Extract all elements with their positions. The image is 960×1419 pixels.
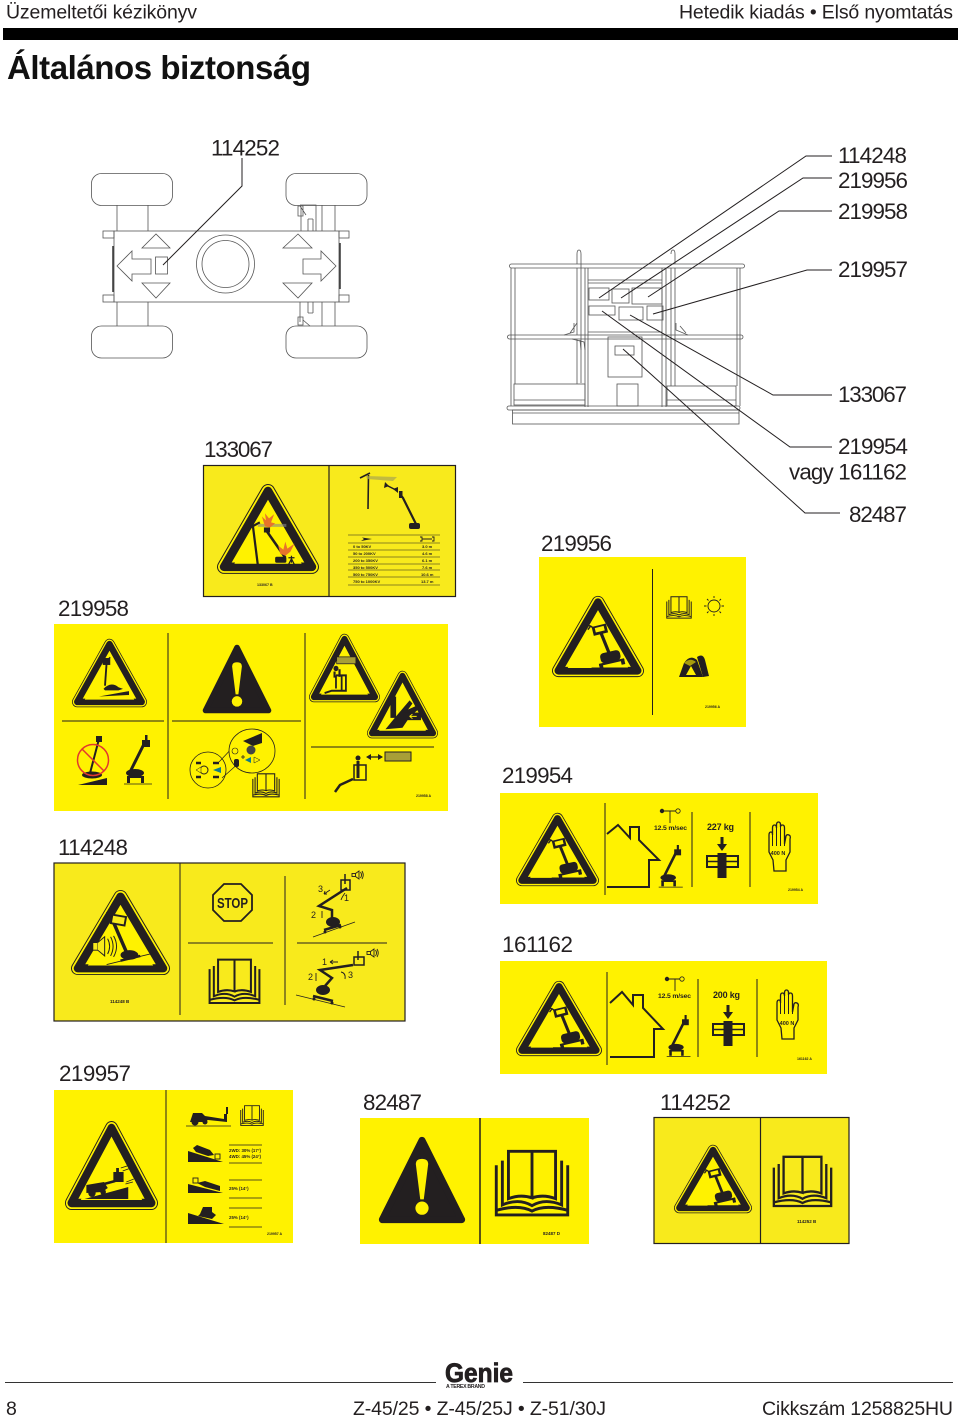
- table: voltage clearances: 0 to 50KV: [353, 544, 372, 549]
- icon: wind speed: [654, 809, 687, 832]
- part code: 161162 A: [797, 1057, 812, 1061]
- header right text: Hetedik kiadás • Első nyomtatás: [679, 2, 953, 24]
- icon: retrieval sequence lower: [296, 949, 378, 1007]
- icon: operator clearance: [335, 752, 411, 792]
- heading: 219958: 219958: [58, 596, 129, 621]
- heading: 219954: 219954: [502, 763, 573, 788]
- icon: retrieval sequence lower: 2: [308, 972, 313, 982]
- callouts: platform labels and leader lines: 82487: [849, 502, 907, 527]
- footer rules: [5, 1382, 953, 1384]
- icon: manual: [667, 597, 691, 618]
- part code: 219956 A: [705, 705, 721, 709]
- callouts: platform labels and leader lines: 219954: [838, 434, 908, 459]
- part code: 114248 B: [110, 999, 130, 1004]
- table: voltage clearances: 200 to 350KV: [353, 558, 378, 563]
- slope limits text: [229, 1145, 262, 1227]
- table: voltage clearances: 7.6 m: [422, 565, 433, 570]
- callouts: platform labels and leader lines: vagy 161162: [789, 460, 907, 484]
- part code: 114252 B: [797, 1219, 817, 1224]
- icon: prohibited tilted machine: [78, 736, 108, 785]
- panel: decal 114252: [654, 1117, 849, 1244]
- icon: load limit: [707, 822, 738, 878]
- icon: warning tent: [679, 656, 709, 677]
- icon: retrieval sequence upper: [311, 871, 363, 937]
- panel: decal 219956: [539, 557, 746, 727]
- heading: 82487: 82487: [363, 1090, 422, 1115]
- diagram: platform front view: [507, 250, 744, 424]
- callout: 114252 on chassis: 114252: [211, 136, 280, 160]
- icon: load limit: [713, 990, 744, 1046]
- table: voltage clearances: 3.0 m: [422, 544, 433, 549]
- icon: tip-over triangle: [522, 819, 593, 880]
- logo: Genie: Genie: [445, 1358, 513, 1388]
- icon: manual: [210, 960, 259, 1003]
- icon: warning: [382, 1140, 462, 1220]
- table: voltage clearances: [348, 535, 440, 585]
- icon: load limit: 227 kg: [707, 822, 734, 832]
- icon: crush hazard triangle: [314, 639, 375, 697]
- part code: 82487 D: [543, 1231, 561, 1236]
- icon: manual force: 400 N: [780, 1021, 794, 1027]
- icon: manual force: [769, 822, 790, 871]
- panel: decal 219954: [500, 793, 818, 904]
- icon: sun: [704, 596, 724, 616]
- heading: 219957: 219957: [59, 1061, 131, 1086]
- icon: tip-over triangle: [522, 987, 596, 1050]
- panel: decal 219958: [54, 624, 448, 811]
- icon: wind speed: 12.5 m/sec: [654, 825, 687, 832]
- slope limits text: 25% (14°): [229, 1215, 249, 1220]
- part code: 133067 B: [257, 583, 273, 587]
- icon: retrieval sequence upper: 1: [344, 893, 349, 903]
- icon: hand crush triangle: [372, 676, 433, 733]
- panel: decal 82487: [360, 1118, 589, 1244]
- icon: stowed machine: [186, 1107, 231, 1126]
- title: Általános biztonság: [7, 49, 311, 86]
- table: voltage clearances: 10.6 m: [421, 572, 434, 577]
- part code: 219958 A: [416, 794, 432, 798]
- slope limits text: 25% (14°): [229, 1186, 249, 1191]
- icon: tilt alarm triangle: [78, 897, 163, 968]
- table: voltage clearances: 13.7 m: [421, 579, 434, 584]
- icon: wind speed: [658, 977, 691, 1000]
- table: voltage clearances: 750 to 1000KV: [353, 579, 380, 584]
- heading: 114252: 114252: [660, 1090, 731, 1115]
- icon: machine: [659, 845, 683, 887]
- icon: electrocution warning triangle: [224, 491, 312, 567]
- icon: house: [610, 992, 663, 1057]
- icon: slope warning triangle: [72, 1128, 151, 1203]
- icon: retrieval sequence lower: 1: [322, 957, 327, 967]
- table: voltage clearances: 4.6 m: [422, 551, 433, 556]
- icon: house: [607, 825, 659, 887]
- callout: 114252 on chassis: [163, 136, 280, 265]
- callouts: platform labels and leader lines: 219957: [838, 257, 908, 282]
- icon: load limit: 200 kg: [713, 990, 740, 1000]
- icon: stop sign: STOP: [217, 895, 248, 912]
- heading: 161162: 161162: [502, 932, 573, 957]
- icon: tip-over triangle: [679, 1150, 747, 1208]
- icon: machine: [667, 1015, 690, 1057]
- heading: 114248: 114248: [58, 835, 128, 860]
- slope limits text: 4WD: 45% (24°): [229, 1154, 262, 1159]
- icon: manual: [774, 1157, 831, 1206]
- callouts: platform labels and leader lines: 133067: [838, 382, 907, 407]
- callouts: platform labels and leader lines: [599, 143, 908, 527]
- part code: 219957 A: [267, 1232, 283, 1236]
- icon: retrieval sequence upper: 3: [318, 884, 323, 894]
- table: voltage clearances: 350 to 500KV: [353, 565, 378, 570]
- slope limits text: 2WD: 30% (17°): [229, 1148, 262, 1153]
- icon: manual force: 400 N: [771, 851, 785, 857]
- icon: wind speed: 12.5 m/sec: [658, 993, 691, 1000]
- icon: tip-over on slope triangle: [77, 644, 142, 702]
- icon: manual force: [777, 990, 798, 1039]
- panel: decal 133067: [204, 465, 456, 596]
- icon: stop sign: [213, 884, 252, 921]
- table: voltage clearances: 50 to 200KV: [353, 551, 376, 556]
- callouts: platform labels and leader lines: 219956: [838, 168, 908, 193]
- icon: manual: [253, 774, 279, 797]
- callouts: platform labels and leader lines: 219958: [838, 199, 908, 224]
- header rule: [3, 28, 958, 40]
- icon: manual: [496, 1151, 568, 1215]
- icon: retrieval sequence upper: 2: [311, 910, 316, 920]
- icon: slope downhill: [188, 1178, 223, 1193]
- panel: decal 219957: [54, 1090, 293, 1243]
- logo: Genie: A TEREX BRAND: [446, 1384, 485, 1390]
- panel: decal 114248: [54, 863, 405, 1021]
- icon: level machine: [124, 735, 152, 784]
- table: voltage clearances: 6.1 m: [422, 558, 433, 563]
- heading: 219956: 219956: [541, 531, 612, 556]
- table: voltage clearances: 500 to 750KV: [353, 572, 378, 577]
- icon: power line clearance: [360, 473, 420, 529]
- part code: 219954 A: [788, 888, 804, 892]
- icon: slope uphill: [188, 1145, 223, 1162]
- icon: slope side: [188, 1207, 224, 1224]
- icon: retrieval sequence lower: 3: [348, 970, 353, 980]
- panel: decal 161162: [500, 961, 827, 1074]
- icon: tip-over triangle: [558, 602, 638, 671]
- icon: manual: [241, 1106, 263, 1125]
- icon: drive direction diagram: [190, 729, 275, 788]
- diagram: chassis top view: [92, 174, 367, 358]
- callouts: platform labels and leader lines: 114248: [838, 143, 907, 168]
- icon: warning: [206, 648, 268, 710]
- heading: 133067: 133067: [204, 437, 273, 462]
- header left text: Üzemeltetői kézikönyv: [6, 2, 197, 24]
